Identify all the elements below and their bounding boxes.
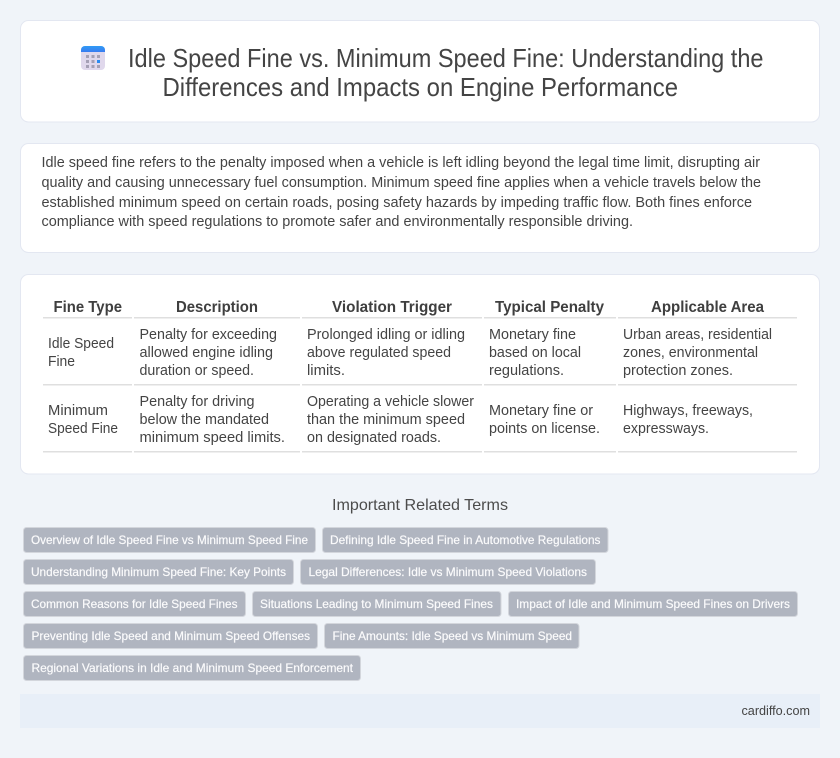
panel: introduction [20,144,820,252]
tag: understanding minimum speed fine [24,560,294,584]
table row: idle speed fine: limits. [307,363,345,379]
tag: defining idle speed fine: Defining Idle Speed Fine in Automotive Regulations [330,533,600,547]
panel: related term tags [24,528,798,680]
table row: minimum speed fine: Highways, freeways, [623,403,753,419]
text block: introduction paragraph: quality and causing unnecessary fuel consumption. Minimum speed fine applies when a vehicle travels below the [42,175,761,191]
table row: minimum speed fine: minimum speed limits. [140,430,285,446]
table row: idle speed fine: Prolonged idling or idling [307,327,465,343]
title [128,45,764,102]
footer source text: cardiffo.com [742,703,810,718]
panel: header [20,20,820,122]
table header row: Fine Type [54,299,122,316]
tag: common reasons: Common Reasons for Idle Speed Fines [31,597,238,611]
text block: introduction paragraph: Idle speed fine refers to the penalty imposed when a vehicle is left idling beyond the legal time limit, disrupting air [42,155,760,171]
tag: preventing [24,624,318,648]
table row: minimum speed fine: points on license. [489,421,600,437]
table row: idle speed fine: protection zones. [623,363,733,379]
tag: overview: Overview of Idle Speed Fine vs Minimum Speed Fine [31,533,308,547]
table header row: Typical Penalty [495,299,604,316]
tag: situations: Situations Leading to Minimum Speed Fines [260,597,493,611]
title: Idle Speed Fine vs. Minimum Speed Fine: Understanding the [128,45,764,73]
heading: important related terms: Important Related Terms [332,497,508,514]
table row: idle speed fine: Fine [48,354,75,370]
table row: idle speed fine: Penalty for exceeding [140,327,277,343]
table row: idle speed fine: above regulated speed [307,345,451,361]
table row: minimum speed fine: Monetary fine or [489,403,593,419]
table row: minimum speed fine: Operating a vehicle slower [307,394,474,410]
table row: idle speed fine: Monetary fine [489,327,576,343]
tag: situations [252,592,501,616]
table header row: Violation Trigger [332,299,452,316]
table header row: Description [176,299,258,316]
tag: preventing: Preventing Idle Speed and Minimum Speed Offenses [32,629,310,643]
table row: idle speed fine: regulations. [489,363,564,379]
tag: understanding minimum speed fine: Understanding Minimum Speed Fine: Key Points [31,565,286,579]
tag: legal differences: Legal Differences: Idle vs Minimum Speed Violations [308,565,587,579]
text block: introduction paragraph: established minimum speed on certain roads, posing safety hazards by impeding traffic flow. Both fines enforce [42,195,752,211]
table row: idle speed fine [43,327,797,386]
tag: defining idle speed fine [322,528,608,552]
title: Differences and Impacts on Engine Performance [162,74,678,102]
table header row [43,299,797,318]
table row: idle speed fine: allowed engine idling [140,345,273,361]
text block: introduction paragraph: compliance with speed regulations to promote safer and environmentally responsible driving. [42,214,633,230]
tag: fine amounts: Fine Amounts: Idle Speed vs Minimum Speed [332,629,572,643]
table row: idle speed fine: Idle Speed [48,336,114,352]
tag: overview [24,528,316,552]
table row: minimum speed fine: below the mandated [140,412,269,428]
table row: minimum speed fine: Penalty for driving [140,394,254,410]
footer bar [20,694,820,728]
panel: comparison table [20,274,820,474]
table row: idle speed fine: based on local [489,345,581,361]
table header row: Applicable Area [651,299,764,316]
table row: minimum speed fine: expressways. [623,421,709,437]
table row: idle speed fine: Urban areas, residential [623,327,772,343]
tag: regional variations [24,656,360,680]
tag: regional variations: Regional Variations in Idle and Minimum Speed Enforcement [32,661,354,675]
table row: idle speed fine: zones, environmental [623,345,758,361]
tag: legal differences [300,560,596,584]
tag: common reasons [24,592,246,616]
tag: impact: Impact of Idle and Minimum Speed Fines on Drivers [516,597,790,611]
table row: minimum speed fine: than the minimum speed [307,412,465,428]
icon: calendar [81,46,105,70]
table row: minimum speed fine: Minimum [48,403,108,419]
text block: introduction paragraph [42,155,761,230]
table row: idle speed fine: duration or speed. [140,363,254,379]
table row: minimum speed fine: Speed Fine [48,421,118,437]
tag: impact [508,592,798,616]
tag: fine amounts [324,624,579,648]
table row: minimum speed fine [43,394,797,452]
table row: minimum speed fine: on designated roads. [307,430,441,446]
